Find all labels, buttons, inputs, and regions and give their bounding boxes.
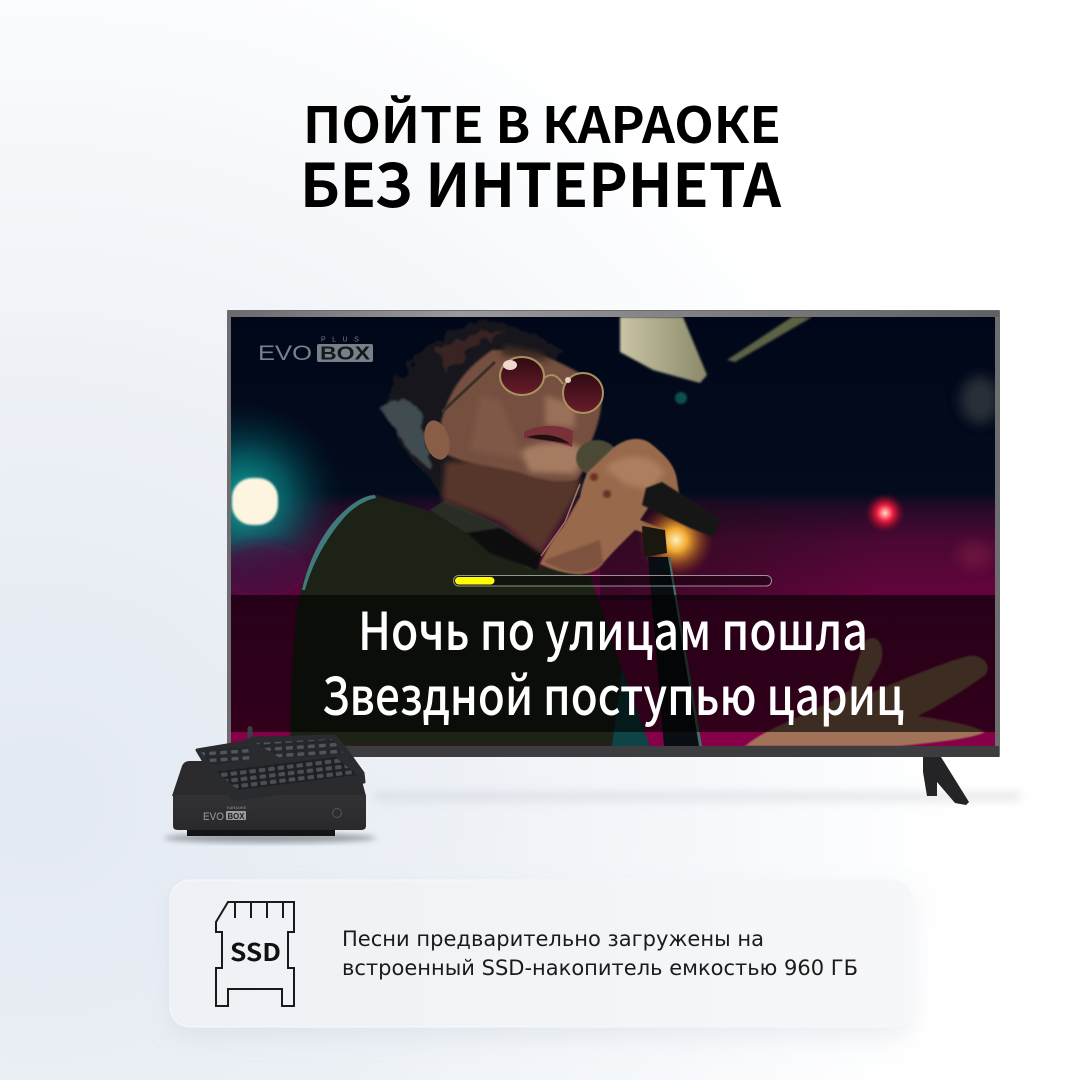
icon: ssd card: SSD — [230, 933, 281, 968]
shirt — [290, 495, 625, 746]
stage lights — [145, 317, 1000, 600]
extended hand — [745, 638, 988, 746]
singer — [290, 320, 988, 746]
title: БЕЗ ИНТЕРНЕТА — [300, 138, 782, 225]
box feet — [187, 830, 335, 836]
box logo — [203, 805, 247, 823]
sunglasses — [442, 357, 603, 413]
box logo: EVO — [203, 811, 224, 823]
box logo: KARAOKE — [227, 805, 247, 810]
box logo: BOX — [228, 812, 245, 821]
evobox logo on screen: PLUS — [321, 336, 365, 344]
remote body — [197, 736, 364, 799]
antenna — [248, 726, 252, 748]
feature text — [342, 927, 858, 981]
tv frame — [227, 310, 1000, 757]
neck rim light — [541, 484, 580, 556]
lyrics: Звездной поступью цариц — [322, 655, 904, 730]
box shadow — [164, 833, 376, 843]
microphone — [638, 482, 721, 746]
teal scarf — [612, 670, 650, 746]
box power button — [332, 808, 342, 818]
box front — [173, 795, 366, 830]
feature panel — [170, 880, 912, 1027]
subtitle band — [231, 595, 995, 732]
tv screen photo — [231, 317, 995, 746]
evobox logo on screen: BOX — [320, 344, 370, 364]
evobox logo on screen — [260, 336, 373, 362]
face — [441, 350, 602, 481]
karaoke progress bar — [454, 576, 772, 586]
title: ПОЙТЕ В КАРАОКЕ — [303, 86, 781, 158]
remote top keys centre — [256, 739, 344, 758]
hair — [385, 320, 565, 500]
tv stand foot — [923, 757, 969, 805]
shadow under tv — [375, 793, 1020, 800]
feature text: Песни предварительно загружены на — [342, 927, 764, 952]
ear — [424, 420, 450, 460]
title — [300, 86, 782, 225]
lyrics: Ночь по улицам пошла — [358, 590, 868, 665]
evobox logo on screen: EVO — [258, 342, 312, 365]
feature text: встроенный SSD-накопитель емкостью 960 ГБ — [342, 956, 858, 981]
mouth — [524, 426, 573, 447]
set-top box with keyboard remote — [164, 726, 376, 843]
remote top keys left — [201, 746, 251, 766]
tv — [145, 310, 1000, 757]
box top — [172, 761, 366, 796]
icon: ssd card — [216, 902, 294, 1006]
hand with microphone — [540, 439, 680, 574]
neck — [442, 455, 580, 553]
collar — [430, 500, 540, 570]
remote keyboard keys — [216, 757, 358, 790]
lyrics — [324, 612, 904, 727]
